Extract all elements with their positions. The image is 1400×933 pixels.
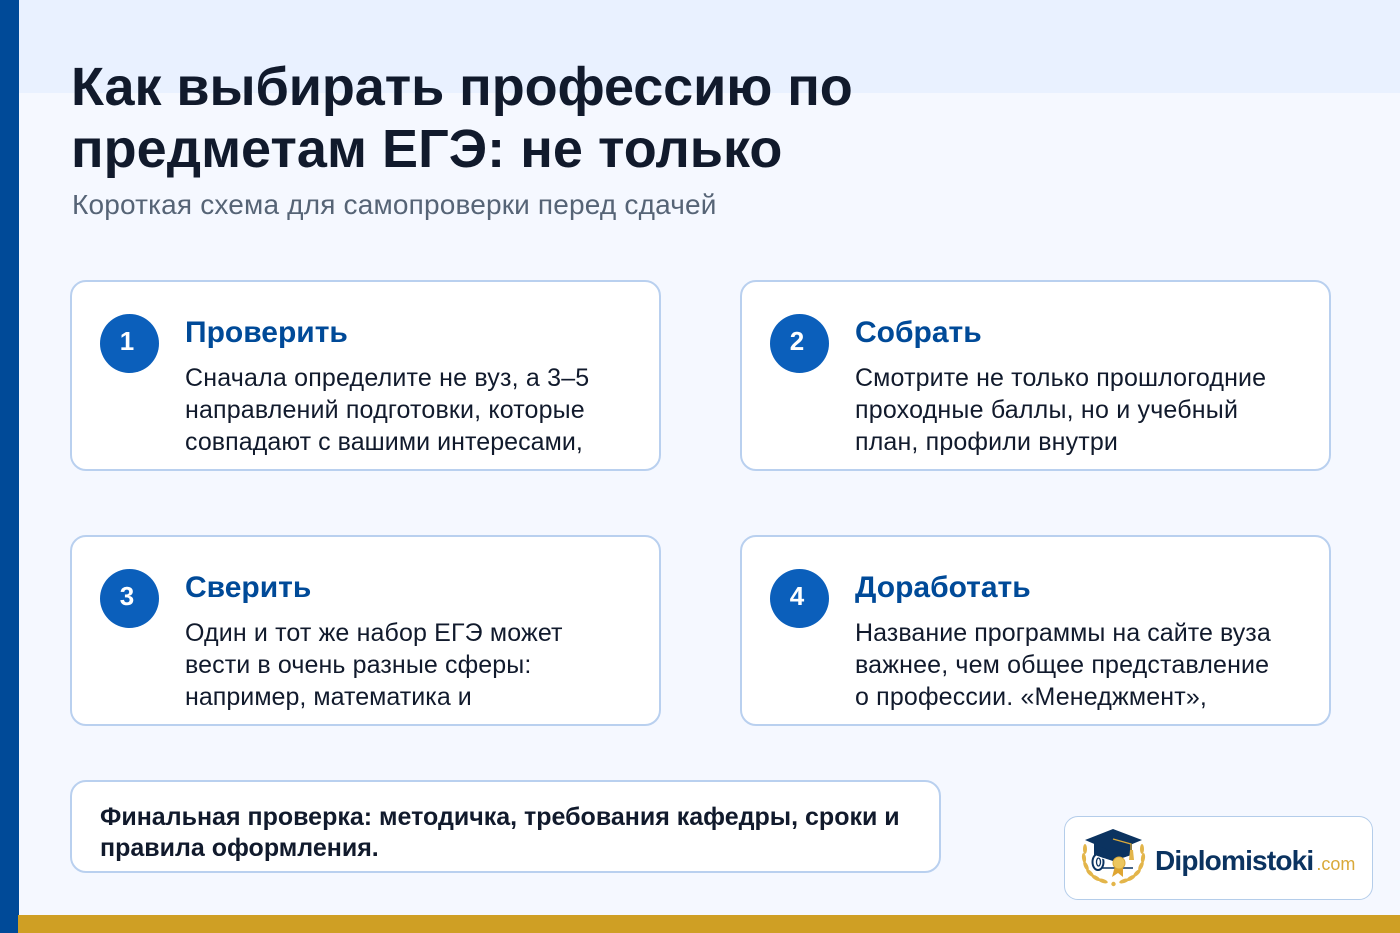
step 2 heading: Собрать [855, 316, 982, 349]
title: предметам ЕГЭ: не только [71, 119, 782, 179]
step 3 text [185, 619, 563, 711]
bottom gold bar [18, 915, 1400, 933]
logo card [1064, 816, 1373, 900]
step 1 heading: Проверить [185, 316, 348, 349]
step 4 text: о профессии. «Менеджмент», [855, 683, 1207, 711]
step 2 text [855, 364, 1266, 456]
header band [18, 0, 1400, 93]
panel: step 1 [70, 280, 661, 471]
step 2 text: Смотрите не только прошлогодние [855, 364, 1266, 392]
step 3 heading: Сверить [185, 571, 311, 604]
step 4 text [855, 619, 1271, 711]
step 3 number: 3 [120, 581, 134, 611]
step 4 text: Название программы на сайте вуза [855, 619, 1271, 647]
left accent bar [0, 0, 19, 933]
final check text: Финальная проверка: методичка, требования кафедры, сроки и [100, 803, 900, 831]
step 1 text: совпадают с вашими интересами, [185, 428, 583, 456]
subtitle: Короткая схема для самопроверки перед сдачей [72, 189, 717, 220]
icon: graduation cap with laurel [1082, 829, 1146, 886]
step 3 number [100, 569, 159, 628]
panel: step 2 [740, 280, 1331, 471]
step 1 text [185, 364, 589, 456]
panel: step 4 [740, 535, 1331, 726]
step 1 number: 1 [120, 326, 134, 356]
step 4 number [770, 569, 829, 628]
step 2 number [770, 314, 829, 373]
step 3 text: например, математика и [185, 683, 472, 711]
panel: step 3 [70, 535, 661, 726]
panel: final check [70, 780, 941, 873]
step 3 text: вести в очень разные сферы: [185, 651, 531, 679]
title [71, 57, 853, 179]
final check text [100, 803, 900, 862]
step 1 number [100, 314, 159, 373]
step 1 text: направлений подготовки, которые [185, 396, 585, 424]
step 2 number: 2 [790, 326, 804, 356]
step 4 text: важнее, чем общее представление [855, 651, 1269, 679]
step 1 text: Сначала определите не вуз, а 3–5 [185, 364, 589, 392]
step 3 text: Один и тот же набор ЕГЭ может [185, 619, 563, 647]
step 2 text: план, профили внутри [855, 428, 1118, 456]
step 4 heading: Доработать [855, 571, 1031, 604]
final check text: правила оформления. [100, 834, 379, 862]
title: Как выбирать профессию по [71, 57, 853, 117]
logo wordmark: Diplomistoki.com [1155, 845, 1355, 876]
step 2 text: проходные баллы, но и учебный [855, 396, 1238, 424]
step 4 number: 4 [790, 581, 804, 611]
